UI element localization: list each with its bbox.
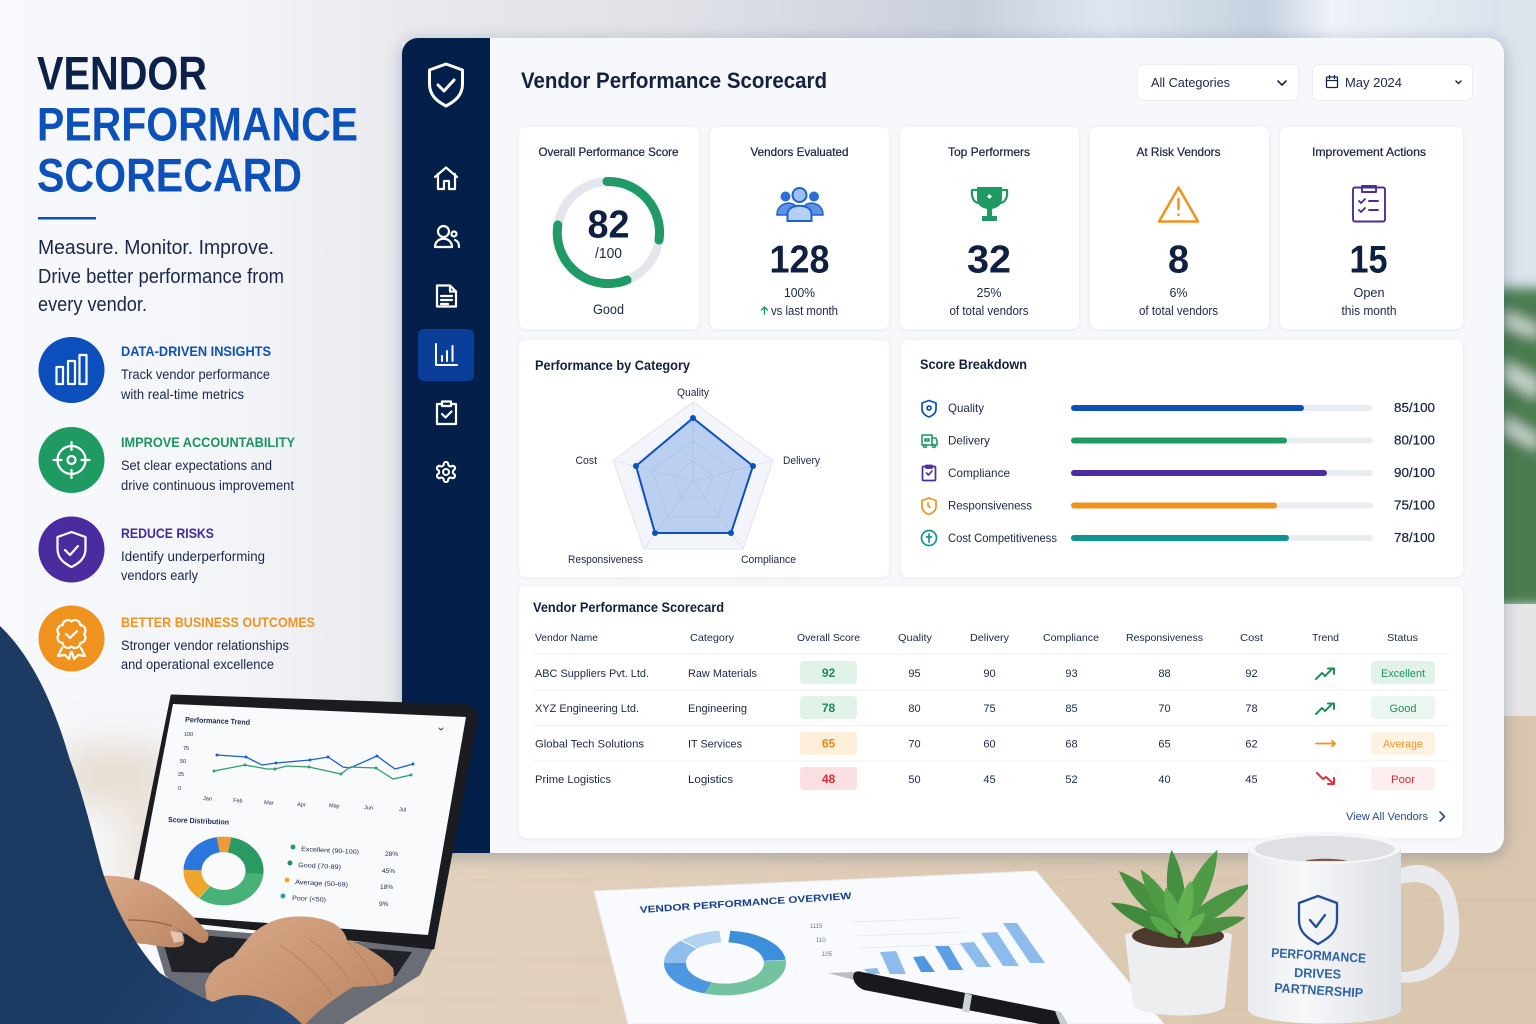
- dropdown: month: [1312, 64, 1472, 100]
- table header: Status: [1387, 632, 1418, 644]
- row: compliance: [922, 466, 1435, 480]
- table row: Prime Logistics: Logistics: [688, 774, 734, 786]
- radar chart: Responsiveness: [568, 554, 643, 566]
- dropdown: month: May 2024: [1345, 75, 1402, 90]
- screen: performance trend: Performance Trend: [185, 715, 251, 727]
- table header: Cost: [1240, 632, 1263, 644]
- row: delivery: Delivery: [948, 434, 990, 448]
- report donut: [654, 926, 796, 1000]
- radar chart: [568, 387, 820, 566]
- table row: XYZ Engineering: 78: [822, 701, 835, 715]
- card: improvement actions: this month: [1342, 304, 1397, 318]
- benefit: data-driven insights: [38, 337, 271, 403]
- card: improvement actions: 15: [1350, 238, 1388, 282]
- panel: vendor table: [519, 586, 1463, 838]
- benefit: better business outcomes: [38, 606, 315, 672]
- report bar chart: 105: [822, 952, 833, 958]
- row: cost competitiveness: [922, 530, 1435, 546]
- benefit: improve accountability: drive continuous improvement: [121, 478, 294, 493]
- screen: score distribution: Excellent (90-100): [301, 846, 359, 856]
- table row: ABC Suppliers: [535, 661, 1435, 684]
- link: view all vendors: View All Vendors: [1346, 811, 1428, 823]
- table row: Prime Logistics: 45: [983, 774, 996, 786]
- screen: performance trend: Feb: [233, 798, 243, 805]
- panel: performance by category: Performance by Category: [535, 358, 690, 373]
- report bar chart: [810, 918, 1045, 974]
- screen: score distribution: 9%: [379, 901, 389, 908]
- icon: home: [435, 168, 457, 189]
- table row: Global Tech: [535, 732, 1435, 755]
- card: improvement actions: Open: [1354, 285, 1384, 300]
- table row: Global Tech: 65: [822, 736, 835, 750]
- row: responsiveness: Responsiveness: [948, 498, 1032, 512]
- row: delivery: [922, 434, 1435, 448]
- screen: performance trend: Jun: [364, 805, 373, 812]
- dashboard panel: [402, 38, 1504, 853]
- table row: XYZ Engineering: Good: [1390, 703, 1416, 715]
- table row: Global Tech: 68: [1065, 738, 1078, 750]
- table row: Global Tech: 62: [1245, 738, 1258, 750]
- icon: document: [437, 286, 456, 306]
- panel: score breakdown: Score Breakdown: [920, 357, 1027, 372]
- card: overall performance score: /100: [595, 246, 622, 262]
- card: overall performance score: Overall Performance Score: [538, 145, 679, 159]
- screen: score distribution: Good (70-89): [298, 862, 341, 871]
- table row: ABC Suppliers: 88: [1158, 668, 1171, 680]
- card: at risk vendors: 6%: [1170, 286, 1188, 300]
- benefit: reduce risks: REDUCE RISKS: [121, 525, 214, 541]
- right hand: [205, 916, 394, 1024]
- table row: Prime Logistics: 45: [1245, 774, 1258, 786]
- card: top performers: 25%: [976, 286, 1002, 300]
- card: vendors evaluated: 128: [770, 238, 830, 282]
- card: vendors evaluated: 100%: [784, 286, 815, 300]
- screen: performance trend: May: [329, 803, 340, 810]
- benefit: data-driven insights: with real-time metrics: [120, 387, 244, 402]
- icon: trophy: [972, 187, 1007, 221]
- icon: shield logo: [430, 64, 462, 106]
- screen: score distribution: Average (50-69): [295, 879, 348, 889]
- tagline: every vendor.: [38, 293, 147, 316]
- mug slogan: PARTNERSHIP: [1274, 980, 1364, 1000]
- card: overall performance score: [519, 127, 699, 329]
- screen: score distribution: 18%: [380, 884, 393, 891]
- table row: Prime Logistics: 50: [908, 774, 921, 786]
- mug slogan: PERFORMANCE: [1271, 945, 1367, 966]
- dropdown: categories: All Categories: [1151, 75, 1230, 90]
- screen: score distribution: 28%: [385, 851, 398, 858]
- table header: Responsiveness: [1126, 632, 1203, 644]
- table row: Prime Logistics: Prime Logistics: [535, 774, 612, 786]
- row: compliance: 90/100: [1394, 466, 1435, 480]
- table row: XYZ Engineering: 80: [908, 703, 921, 715]
- benefit: reduce risks: Identify underperforming: [121, 549, 265, 564]
- table header: Quality: [898, 632, 933, 644]
- table row: Prime Logistics: [535, 767, 1435, 790]
- photo: succulent plant: [1107, 846, 1256, 1016]
- row: compliance: Compliance: [948, 466, 1010, 480]
- icon: settings gear: [437, 462, 455, 482]
- table header: Compliance: [1043, 632, 1099, 644]
- card: vendors evaluated: [710, 127, 889, 329]
- table row: Global Tech: 60: [983, 738, 996, 750]
- card: top performers: 32: [967, 238, 1011, 282]
- sidebar: [402, 38, 490, 853]
- table row: ABC Suppliers: ABC Suppliers Pvt. Ltd.: [535, 668, 649, 680]
- screen: performance trend: 25: [178, 772, 184, 778]
- table row: XYZ Engineering: 75: [983, 703, 996, 715]
- screen: performance trend: Jul: [399, 807, 406, 813]
- table header: Vendor Name: [535, 632, 598, 644]
- card: improvement actions: Improvement Actions: [1312, 145, 1426, 159]
- table row: ABC Suppliers: Raw Materials: [688, 668, 757, 680]
- card: at risk vendors: At Risk Vendors: [1136, 145, 1220, 159]
- shirt sleeve: [0, 626, 302, 1024]
- card: overall performance score: Good: [593, 301, 624, 317]
- photo: person with hands on laptop: [0, 626, 394, 1024]
- card: top performers: Top Performers: [948, 145, 1030, 159]
- report bar chart: 110: [816, 938, 826, 944]
- row: delivery: 80/100: [1394, 434, 1435, 448]
- table header: Delivery: [970, 632, 1010, 644]
- panel: performance by category: [519, 340, 889, 577]
- table row: Global Tech: Average: [1383, 738, 1423, 750]
- title: VENDOR: [37, 46, 207, 100]
- row: responsiveness: [922, 498, 1435, 514]
- title: SCORECARD: [37, 148, 302, 202]
- card: vendors evaluated: Vendors Evaluated: [750, 145, 848, 159]
- mug shield logo: [1299, 896, 1337, 944]
- screen: performance trend: 0: [178, 786, 181, 792]
- table row: ABC Suppliers: 92: [822, 666, 835, 680]
- card: at risk vendors: [1090, 127, 1269, 329]
- gauge ring: [557, 181, 660, 284]
- table row: XYZ Engineering: 78: [1245, 703, 1258, 715]
- card: overall performance score: 82: [588, 204, 630, 246]
- table row: Global Tech: 65: [1158, 738, 1171, 750]
- card: at risk vendors: of total vendors: [1139, 304, 1218, 318]
- tagline: Measure. Monitor. Improve.: [38, 236, 274, 259]
- screen: score distribution: 45%: [382, 868, 395, 875]
- row: responsiveness: 75/100: [1394, 498, 1435, 512]
- photo: report on desk: [594, 871, 1164, 1024]
- card: top performers: [900, 127, 1079, 329]
- table row: ABC Suppliers: 95: [908, 668, 921, 680]
- table row: XYZ Engineering: [535, 696, 1435, 719]
- screen: performance trend: Apr: [297, 802, 306, 809]
- radar chart: Delivery: [783, 455, 820, 467]
- icon: action checklist: [1353, 186, 1385, 222]
- screen: score distribution: Poor (<50): [292, 895, 326, 904]
- table row: Prime Logistics: 48: [822, 772, 835, 786]
- card: improvement actions: [1280, 127, 1463, 329]
- screen: performance trend: 100: [184, 732, 193, 738]
- table row: XYZ Engineering: 85: [1065, 703, 1078, 715]
- mug slogan: [1271, 945, 1367, 1000]
- card: at risk vendors: 8: [1168, 238, 1189, 282]
- table row: Prime Logistics: 52: [1065, 774, 1078, 786]
- mug slogan: DRIVES: [1294, 965, 1342, 982]
- card: vendors evaluated: vs last month: [771, 304, 838, 318]
- table row: ABC Suppliers: Excellent: [1381, 668, 1425, 680]
- screen: performance trend: 75: [183, 746, 189, 752]
- pen: [828, 971, 1068, 1024]
- radar chart: Quality: [677, 387, 709, 399]
- benefit: reduce risks: [38, 516, 265, 583]
- laptop screen: [133, 704, 466, 935]
- benefit: better business outcomes: BETTER BUSINESS OUTCOMES: [121, 614, 315, 630]
- report bar chart: 1115: [810, 924, 823, 930]
- screen: performance trend: 50: [180, 759, 186, 765]
- icon: clipboard check: [437, 402, 456, 424]
- row: cost competitiveness: 78/100: [1394, 531, 1435, 545]
- screen: performance trend: Jan: [203, 796, 212, 803]
- screen: performance trend: [178, 715, 443, 813]
- screen: score distribution: [168, 815, 398, 908]
- icon: warning triangle: [1159, 188, 1198, 222]
- benefit: data-driven insights: Track vendor performance: [121, 367, 270, 382]
- panel: vendor table: Vendor Performance Scorecard: [533, 600, 724, 615]
- radar chart: Compliance: [741, 554, 796, 566]
- table header: Overall Score: [797, 632, 860, 644]
- row: quality: 85/100: [1394, 401, 1435, 415]
- radar chart: Cost: [576, 455, 597, 467]
- panel: score breakdown: [901, 340, 1463, 577]
- benefit: improve accountability: IMPROVE ACCOUNTABILITY: [121, 434, 296, 450]
- screen: performance trend: Mar: [264, 800, 274, 807]
- screen: score distribution: Score Distribution: [168, 815, 230, 827]
- table row: ABC Suppliers: 93: [1065, 668, 1078, 680]
- table row: Global Tech: Global Tech Solutions: [535, 738, 645, 750]
- icon: vendors group: [777, 188, 823, 221]
- table header: [535, 632, 1418, 644]
- laptop base and keyboard: [150, 925, 433, 1024]
- benefit: data-driven insights: DATA-DRIVEN INSIGHTS: [121, 343, 271, 359]
- dropdown: categories: [1138, 64, 1298, 100]
- benefit: better business outcomes: and operational excellence: [121, 657, 274, 672]
- photo: report on desk: VENDOR PERFORMANCE OVERVIEW: [639, 891, 852, 916]
- benefit: improve accountability: [38, 427, 296, 493]
- table header: Category: [690, 632, 735, 644]
- title: PERFORMANCE: [37, 98, 358, 150]
- photo: laptop: [128, 696, 477, 1024]
- title: [37, 46, 358, 202]
- table row: Global Tech: IT Services: [688, 738, 742, 750]
- left column: [37, 46, 358, 672]
- table header: Trend: [1312, 632, 1339, 644]
- benefit: better business outcomes: Stronger vendor relationships: [121, 638, 289, 653]
- table row: Prime Logistics: 40: [1158, 774, 1171, 786]
- left hand: [100, 876, 208, 947]
- nav active: chart: [418, 329, 474, 381]
- table row: XYZ Engineering: 70: [1158, 703, 1171, 715]
- table row: ABC Suppliers: 92: [1245, 668, 1258, 680]
- table row: XYZ Engineering: XYZ Engineering Ltd.: [535, 703, 639, 715]
- row: quality: [922, 400, 1435, 417]
- icon: users: [435, 226, 459, 247]
- row: cost competitiveness: Cost Competitiveness: [948, 531, 1057, 545]
- wooden desk: [250, 716, 1536, 1024]
- tagline: Drive better performance from: [38, 265, 284, 288]
- table row: ABC Suppliers: 90: [983, 668, 996, 680]
- tagline: [38, 236, 284, 316]
- benefit: improve accountability: Set clear expectations and: [121, 458, 272, 473]
- row: quality: Quality: [948, 401, 984, 415]
- benefit: reduce risks: vendors early: [121, 568, 198, 583]
- dashboard header title: Vendor Performance Scorecard: [521, 68, 827, 93]
- card: top performers: of total vendors: [950, 304, 1028, 318]
- table row: Prime Logistics: Poor: [1391, 774, 1415, 786]
- photo: coffee mug: [1248, 832, 1459, 1024]
- table row: XYZ Engineering: Engineering: [688, 703, 747, 715]
- table row: Global Tech: 70: [908, 738, 921, 750]
